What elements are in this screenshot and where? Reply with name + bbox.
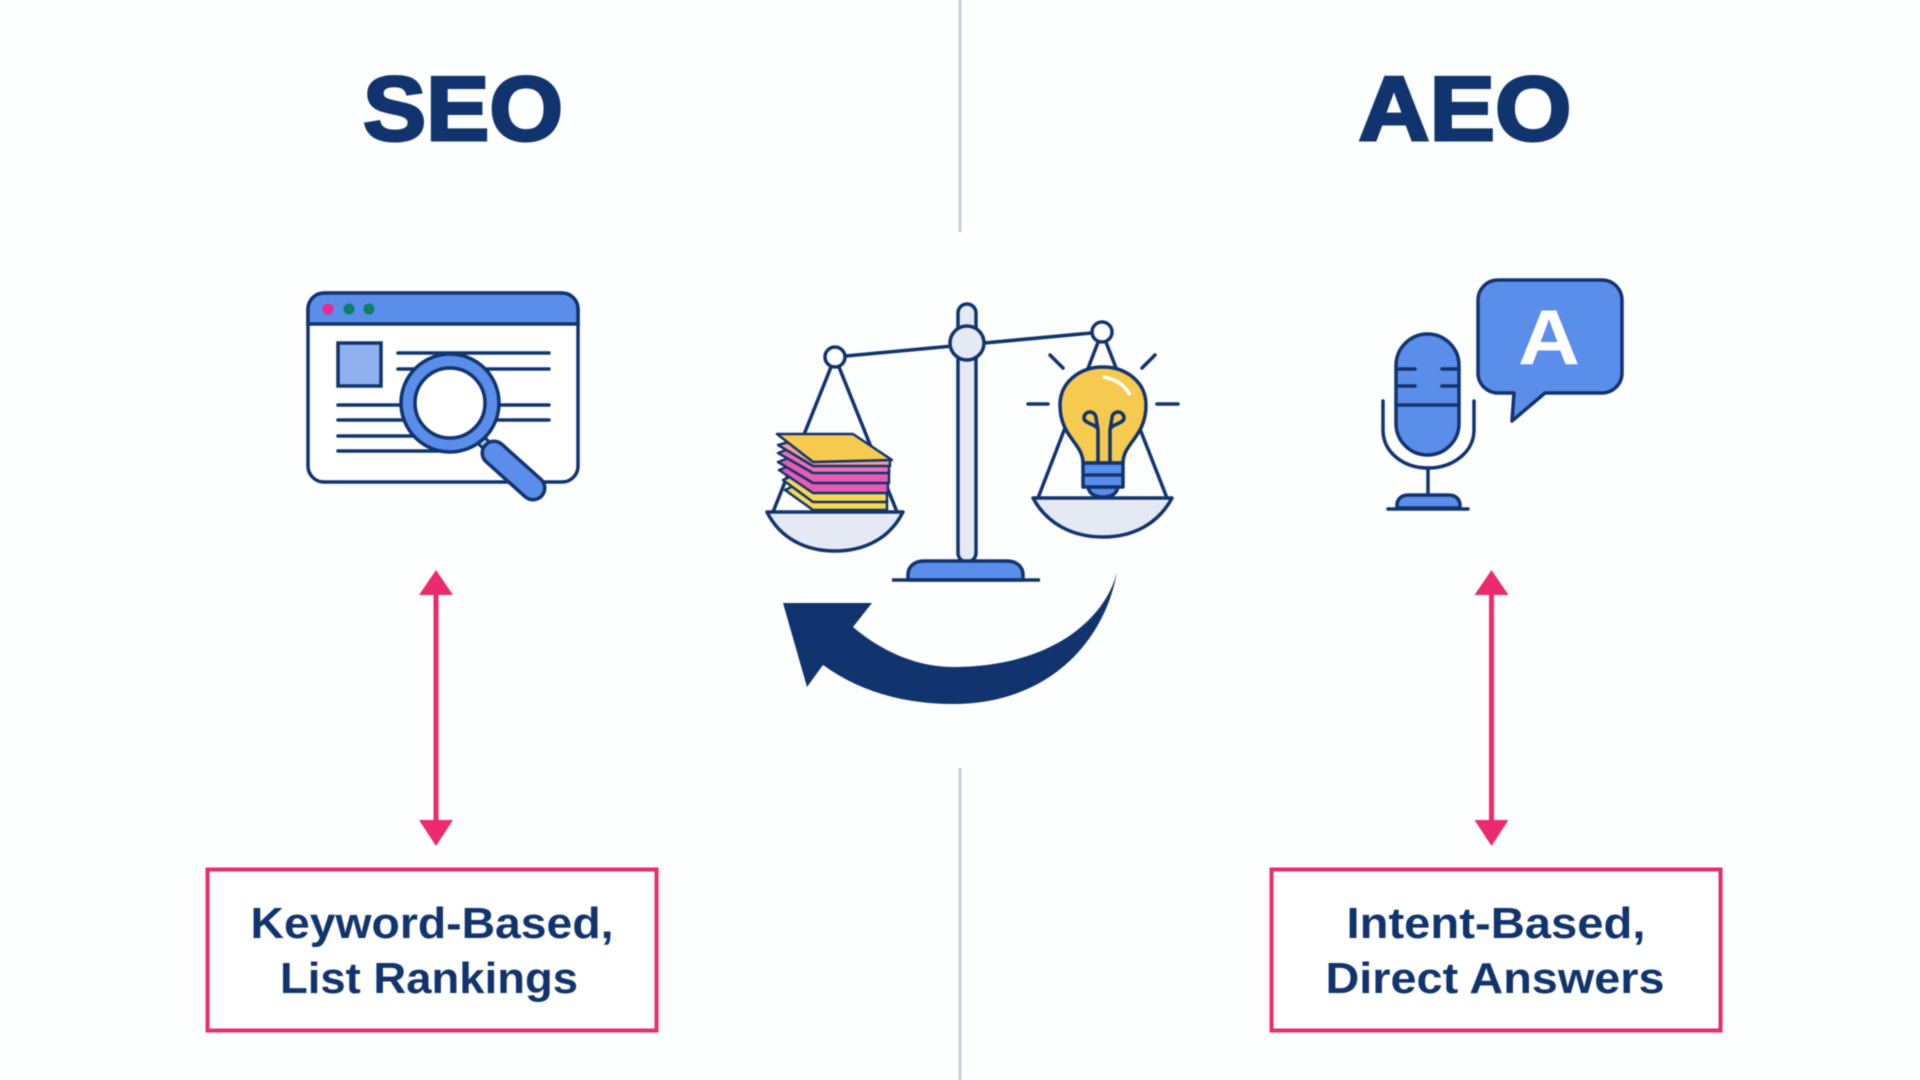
right pan with lightbulb xyxy=(1028,322,1178,537)
icon: browser window with magnifying glass xyxy=(308,293,578,488)
arrow: SEO double-headed pink xyxy=(419,570,453,846)
callout: AEO description: Direct Answers xyxy=(1326,954,1664,1003)
title: AEO: AEO xyxy=(1358,59,1572,160)
icon: microphone with speech bubble xyxy=(1383,280,1622,509)
speech bubble xyxy=(1478,280,1622,421)
callout: SEO description: Keyword-Based, xyxy=(250,899,614,948)
letter A: A xyxy=(1518,293,1580,381)
icon: balance scale with papers and lightbulb xyxy=(767,304,1178,580)
title: SEO: SEO xyxy=(363,59,563,160)
arrow: curved navy arrow from right to left xyxy=(783,572,1117,704)
callout: SEO description: List Rankings xyxy=(280,954,578,1003)
callout: SEO description xyxy=(208,870,656,1030)
arrow: AEO double-headed pink xyxy=(1474,570,1508,846)
callout: AEO description xyxy=(1272,870,1720,1030)
callout: AEO description: Intent-Based, xyxy=(1346,899,1646,948)
microphone xyxy=(1383,334,1474,509)
left pan with stacked papers xyxy=(767,347,903,551)
